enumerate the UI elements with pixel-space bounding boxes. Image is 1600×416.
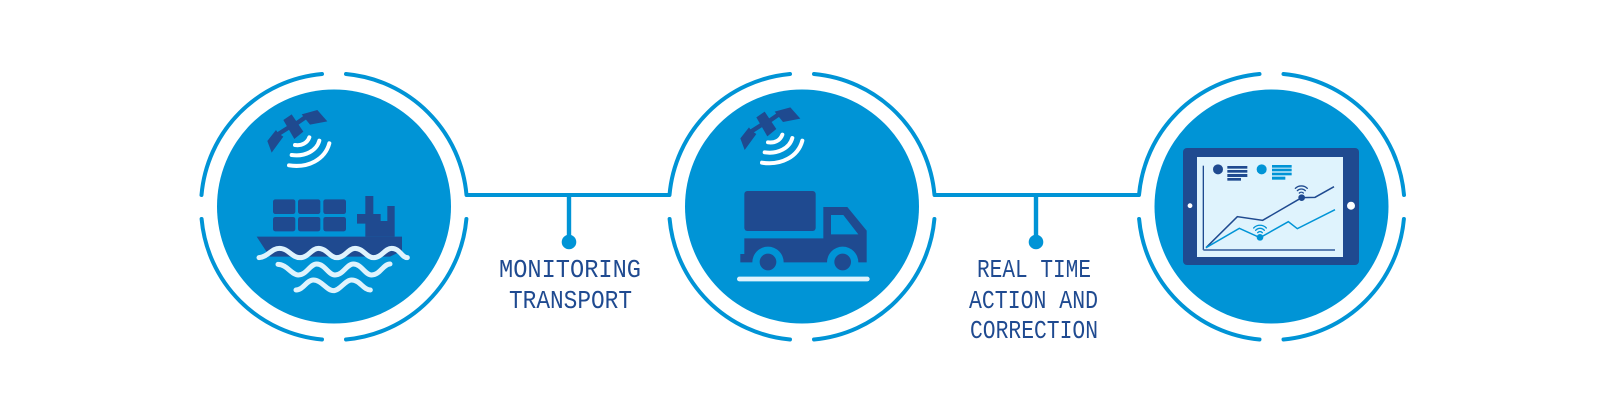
- label: monitoring transport: MONITORING: [499, 256, 641, 285]
- label: real time action and correction: REAL TIME: [977, 256, 1091, 285]
- icon: container ship on waves: [257, 196, 407, 291]
- panel: ship monitoring: [202, 74, 466, 340]
- panel: tablet dashboard: [1139, 74, 1404, 340]
- label: monitoring transport: [499, 256, 641, 316]
- connector: second link: [934, 195, 1139, 249]
- label: real time action and correction: ACTION AND: [969, 287, 1098, 316]
- panel: truck monitoring: [670, 74, 934, 340]
- icon: satellite and signal over truck: [740, 107, 802, 163]
- label: monitoring transport: TRANSPORT: [509, 287, 632, 316]
- connector: first link: [466, 195, 670, 249]
- icon: delivery truck on road: [739, 191, 867, 279]
- icon: tablet with line chart: [1183, 148, 1359, 265]
- icon: satellite and signal over ship: [267, 110, 329, 166]
- chart: two trend lines with legend: [1203, 164, 1335, 250]
- label: real time action and correction: [969, 256, 1098, 346]
- label: real time action and correction: CORRECTION: [970, 317, 1098, 346]
